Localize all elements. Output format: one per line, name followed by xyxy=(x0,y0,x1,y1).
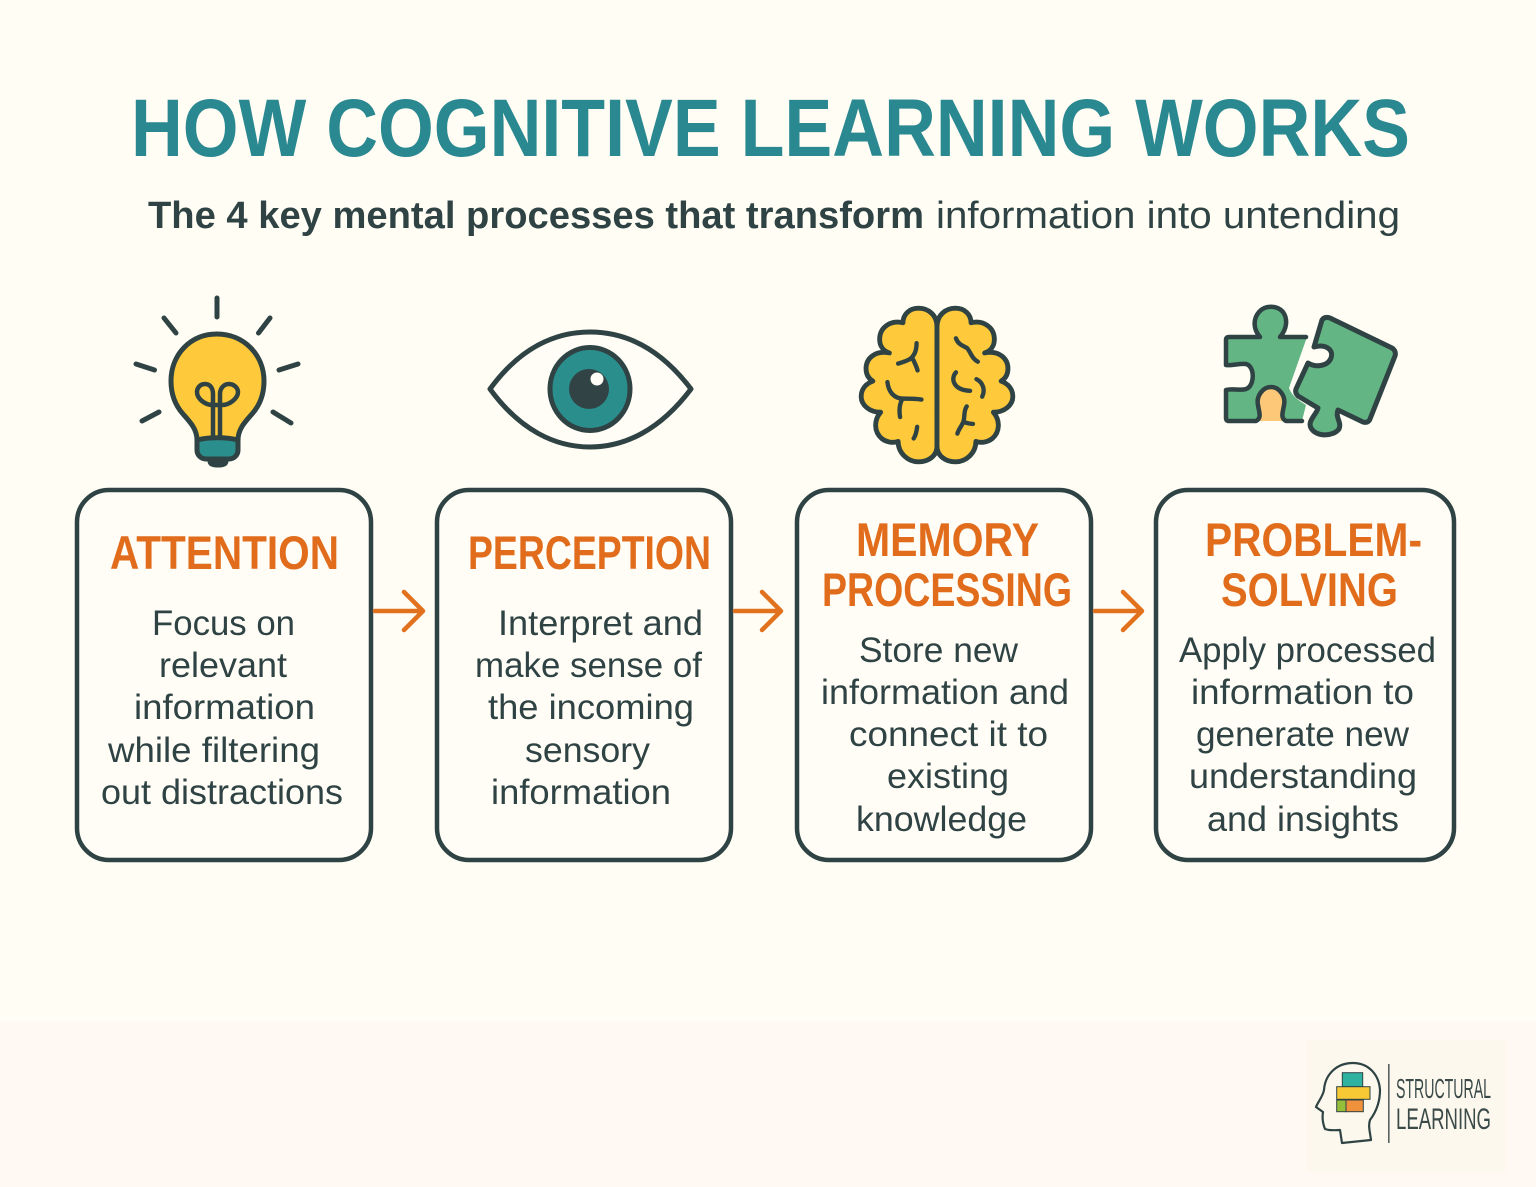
heading: problem-solving: SOLVING xyxy=(1221,563,1398,616)
panel: memory processing xyxy=(797,490,1091,860)
text: problem-solving description: information to xyxy=(1191,673,1414,712)
heading: memory processing xyxy=(822,513,1072,616)
heading: attention: ATTENTION xyxy=(110,526,339,579)
text: perception description: information xyxy=(491,773,671,812)
heading: problem-solving xyxy=(1205,513,1422,616)
icon: light bulb xyxy=(136,298,298,465)
panel: perception xyxy=(437,490,731,860)
heading: memory processing: MEMORY xyxy=(856,513,1039,566)
subtitle xyxy=(148,195,1400,237)
text: perception description: the incoming xyxy=(488,688,694,727)
text: memory processing description: knowledge xyxy=(856,800,1027,839)
text: memory processing description: information and xyxy=(821,673,1069,712)
text: perception description: sensory xyxy=(525,731,650,770)
text: problem-solving description: understanding xyxy=(1189,757,1417,796)
text: problem-solving description: and insights xyxy=(1207,800,1399,839)
text: perception description: Interpret and xyxy=(498,604,703,643)
text: attention description: information xyxy=(134,688,315,727)
text: attention description: while filtering xyxy=(107,731,320,770)
text: problem-solving description: generate new xyxy=(1196,715,1410,754)
text: memory processing description: connect it to xyxy=(849,715,1048,754)
text: perception description xyxy=(475,604,703,812)
subtitle: The 4 key mental processes that transform xyxy=(148,195,924,237)
heading: memory processing: PROCESSING xyxy=(822,563,1072,616)
text: attention description: out distractions xyxy=(101,773,343,812)
panel: attention xyxy=(77,490,371,860)
icon: brain xyxy=(861,308,1013,462)
text: memory processing description: existing xyxy=(887,757,1009,796)
text: perception description: make sense of xyxy=(475,646,702,685)
text: attention description: relevant xyxy=(159,646,287,685)
heading: perception: PERCEPTION xyxy=(468,526,711,579)
arrow: attention to perception xyxy=(375,592,423,630)
logo: structural learning xyxy=(1307,1040,1506,1172)
icon: eye xyxy=(490,332,691,447)
heading: problem-solving: PROBLEM- xyxy=(1205,513,1422,566)
text: memory processing description: Store new xyxy=(859,631,1019,670)
panel: problem-solving xyxy=(1156,490,1454,860)
subtitle: information into untending xyxy=(936,195,1400,237)
arrow: memory processing to problem-solving xyxy=(1095,592,1142,630)
text: attention description: Focus on xyxy=(152,604,295,643)
icon: puzzle pieces xyxy=(1226,307,1395,435)
arrow: perception to memory processing xyxy=(735,592,781,630)
text: attention description xyxy=(101,604,343,812)
text: problem-solving description xyxy=(1179,631,1436,839)
text: memory processing description xyxy=(821,631,1069,839)
text: problem-solving description: Apply processed xyxy=(1179,631,1436,670)
